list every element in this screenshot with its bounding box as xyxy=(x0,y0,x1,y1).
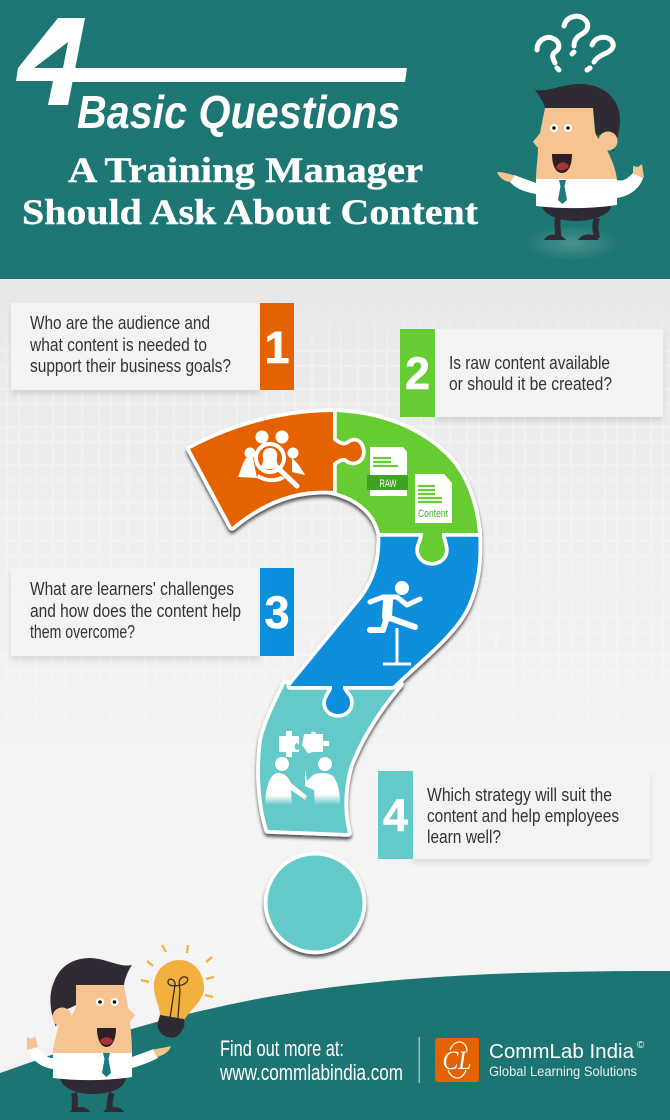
title line: Should Ask About Content: Should Ask About Content xyxy=(22,192,478,232)
piece 4: teal xyxy=(260,684,400,833)
callout 3 panel xyxy=(11,568,260,656)
legs xyxy=(74,1093,112,1110)
face xyxy=(533,108,617,180)
callout 4 question xyxy=(427,785,619,847)
character: idea manager xyxy=(27,958,171,1112)
callout 1 question: what content is needed to xyxy=(29,335,207,355)
footer band xyxy=(0,971,670,1120)
face xyxy=(53,985,135,1053)
header banner xyxy=(0,0,670,279)
icon: raw document xyxy=(367,447,408,496)
eyes xyxy=(96,998,118,1006)
tie xyxy=(102,1053,111,1077)
footer call to action xyxy=(219,1036,403,1085)
arms xyxy=(509,175,536,194)
eyes xyxy=(550,124,572,132)
number 3: 3 xyxy=(264,587,290,638)
number 1 xyxy=(260,303,294,390)
logo registered mark: © xyxy=(637,1040,645,1051)
footer call to action: www.commlabindia.com xyxy=(219,1060,403,1085)
character: puzzled manager xyxy=(497,84,644,240)
mouth xyxy=(97,1028,116,1047)
logo xyxy=(435,1038,645,1082)
logo tagline: Global Learning Solutions xyxy=(489,1064,637,1079)
icon: content document: Content xyxy=(418,508,448,520)
number 4: 4 xyxy=(383,790,408,841)
callout 3 question: them overcome? xyxy=(30,622,135,642)
callout 2 xyxy=(400,329,663,417)
icon: light bulb xyxy=(141,945,214,1038)
callout 2 question: Is raw content available xyxy=(449,353,610,373)
shirt xyxy=(53,1053,132,1080)
legs xyxy=(557,218,597,238)
number 2 xyxy=(400,329,435,417)
bulb rays xyxy=(141,945,214,997)
puzzle outline shadow xyxy=(190,412,479,950)
icon: raw document: RAW xyxy=(380,478,397,490)
icon: content document xyxy=(415,474,452,523)
logo mark: CL xyxy=(442,1046,472,1075)
title rule xyxy=(64,68,407,82)
piece 2: green xyxy=(330,412,478,562)
number 3 xyxy=(260,568,294,656)
tongue xyxy=(100,1037,113,1045)
callout 4 question: Which strategy will suit the xyxy=(427,785,612,805)
tongue xyxy=(556,162,569,170)
ear xyxy=(52,1008,72,1026)
hair xyxy=(535,84,620,152)
number 1: 1 xyxy=(264,322,290,373)
piece 1: orange xyxy=(190,412,362,527)
callout 1 panel xyxy=(11,303,260,390)
number 4 xyxy=(378,771,413,859)
question mark puzzle xyxy=(190,412,479,950)
callout 1 question: support their business goals? xyxy=(30,356,231,376)
title line: Basic Questions: Basic Questions xyxy=(77,86,400,138)
page background xyxy=(0,279,670,979)
callout 1 xyxy=(11,303,294,390)
title xyxy=(16,18,478,232)
footer divider xyxy=(418,1037,420,1083)
bulb base xyxy=(158,1015,184,1038)
bulb glass xyxy=(154,960,204,1020)
icon: audience search xyxy=(238,430,305,486)
mouth xyxy=(552,154,572,173)
icon: hurdle runner xyxy=(370,581,420,664)
callout 2 question: or should it be created? xyxy=(449,374,612,394)
shirt xyxy=(536,179,617,208)
icon: question marks xyxy=(537,16,613,70)
hair xyxy=(50,958,132,1027)
icon: teamwork people and puzzle xyxy=(265,731,340,805)
callout 2 panel xyxy=(435,329,663,417)
callout 3 question: and how does the content help xyxy=(30,601,241,621)
callout 4 panel xyxy=(413,771,650,859)
footer call to action: Find out more at: xyxy=(220,1036,344,1061)
callout 4 question: learn well? xyxy=(427,827,501,847)
arms xyxy=(28,1047,53,1069)
question mark dot xyxy=(268,856,362,950)
callout 3 question xyxy=(30,579,241,642)
callout 3 question: What are learners' challenges xyxy=(30,579,234,599)
title line: A Training Manager: A Training Manager xyxy=(68,150,423,190)
number 2: 2 xyxy=(405,348,430,399)
logo mark xyxy=(435,1038,479,1082)
callout 3 xyxy=(11,568,294,656)
ear xyxy=(598,132,618,150)
callout 1 question: Who are the audience and xyxy=(30,313,210,333)
logo name: CommLab India xyxy=(489,1041,635,1063)
callout 4 xyxy=(378,771,650,859)
callout 1 question xyxy=(29,313,231,376)
title numeral 4 xyxy=(16,18,85,105)
bulb filament xyxy=(168,977,188,1018)
piece 3: blue xyxy=(290,530,479,714)
tie xyxy=(558,180,567,204)
callout 4 question: content and help employees xyxy=(427,806,619,826)
callout 2 question xyxy=(449,353,612,394)
